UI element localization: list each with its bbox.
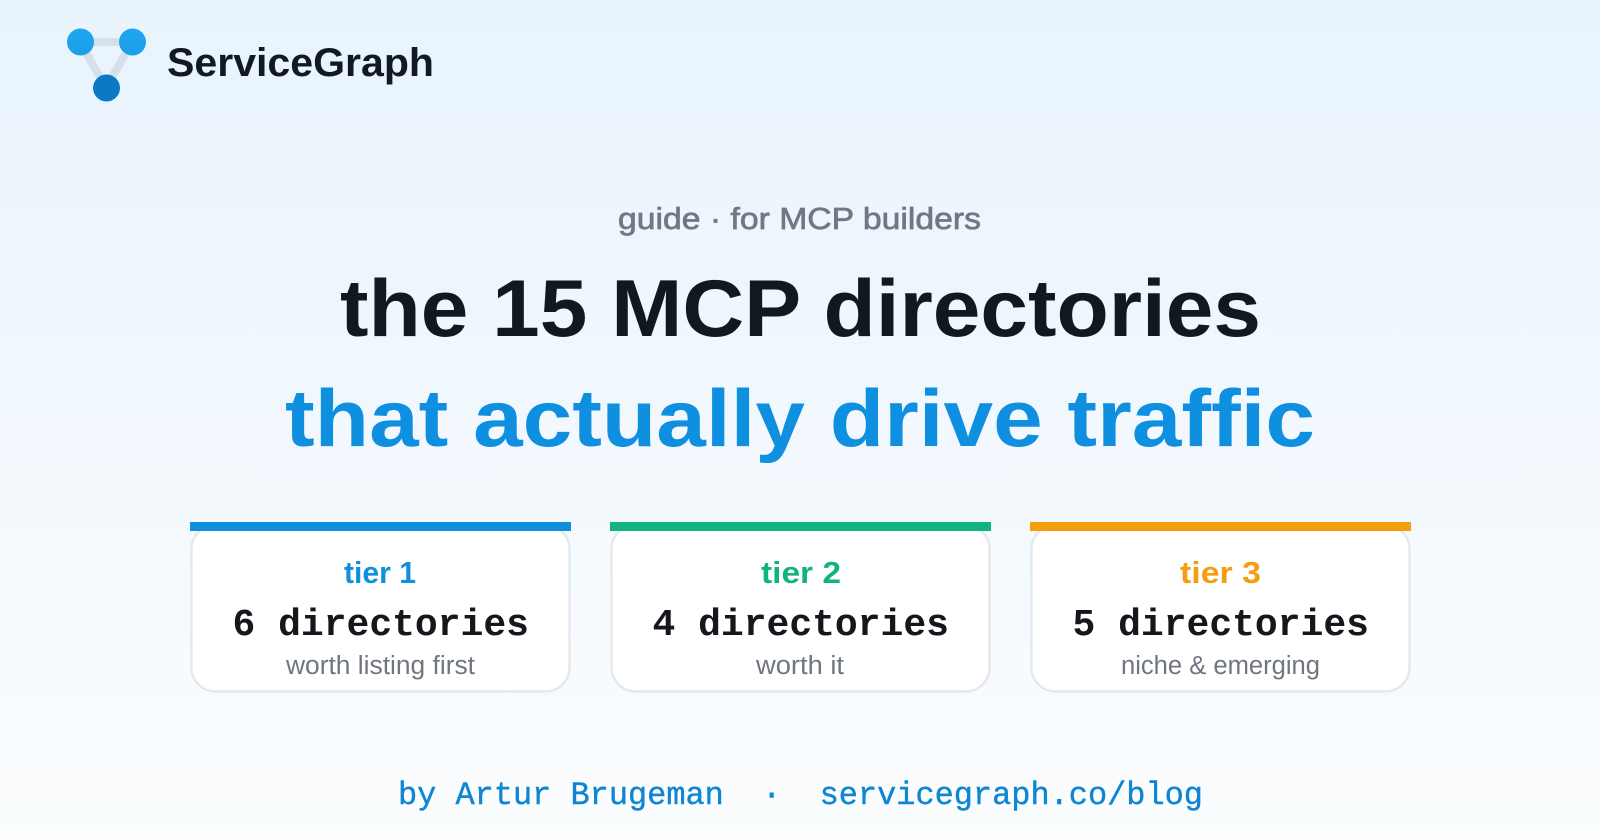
tier 2 note: worth it (755, 652, 844, 680)
icon: graph nodes (67, 28, 146, 102)
tier 2 label: tier 2 (761, 555, 841, 590)
footer byline: by Artur Brugeman · servicegraph.co/blog (398, 777, 1203, 814)
title (285, 264, 1315, 464)
brand name: ServiceGraph (167, 41, 434, 85)
tier 2 count: 4 directories (652, 604, 949, 647)
logo: ServiceGraph (67, 28, 434, 102)
panel: tier 3 (1030, 522, 1411, 692)
title line 1: the 15 MCP directories (340, 264, 1261, 354)
panel: tier 2 (610, 522, 991, 692)
tier 3 count: 5 directories (1072, 604, 1369, 647)
title line 2: that actually drive traffic (285, 374, 1315, 464)
tier 1 label: tier 1 (344, 555, 416, 590)
tier 3 label: tier 3 (1180, 555, 1261, 590)
tier 3 note: niche & emerging (1121, 652, 1320, 680)
panel: tier 1 (190, 522, 571, 692)
tier 1 note: worth listing first (285, 652, 475, 680)
tier 1 count: 6 directories (232, 604, 529, 647)
eyebrow text: guide · for MCP builders (618, 201, 981, 236)
